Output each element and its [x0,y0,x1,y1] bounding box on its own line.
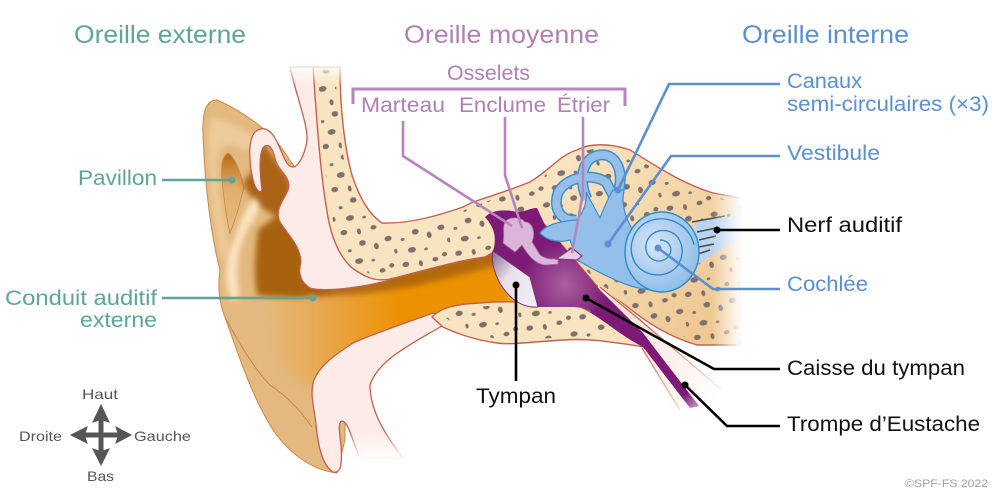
nerve [695,216,740,264]
label: Enclume: Enclume [459,94,546,117]
leader: Marteau [403,121,512,226]
leader: Étrier [572,117,583,253]
label: Osselets: Osselets [447,62,530,85]
compass labels [19,386,191,484]
helix highlight [208,118,258,262]
heading: Oreille externe: Oreille externe [74,21,246,49]
ossicles [503,218,582,265]
malleus and incus [503,218,558,265]
compass labels: Droite [19,428,62,444]
icon: four-way arrows [71,405,131,465]
label: Pavillon: Pavillon [78,167,157,190]
label: Trompe d'Eustache: Trompe d’Eustache [787,413,980,436]
label: Conduit auditif externe [5,287,157,332]
bone pores lower [442,305,628,341]
label: Canaux semi-circulaires [787,70,989,116]
leader: Tympan [512,282,520,381]
compass labels: Gauche [134,428,191,444]
canal outlines [556,155,620,220]
antihelix highlight [226,198,259,300]
leader: Vestibule [604,156,780,248]
cochlea [625,212,699,292]
leader: Pavillon [162,176,236,184]
scapha groove [222,153,244,233]
compass labels: Bas [87,468,114,484]
leader: Trompe d'Eustache [682,382,780,426]
fade right edge [712,190,742,355]
lower pink tissue [312,313,450,472]
nerve fibres [692,216,725,255]
outer ear skin [203,100,345,473]
label: Conduit auditif externe: Conduit auditif [5,287,157,310]
copyright: ©SPF-FS 2022 [905,478,988,490]
label: Canaux semi-circulaires: semi-circulaires (×3) [787,93,989,116]
compass labels: Haut [82,386,118,402]
semicircular canals [556,155,620,220]
upper pink tissue [250,67,400,290]
upper and right temporal bone [313,67,740,345]
stapes [556,248,582,260]
ossicles bracket [353,89,625,106]
fade bottom of tissue [346,430,411,460]
concha dark area [255,205,330,298]
eustachian tube [590,300,699,408]
upper concha shadow [243,140,290,225]
heading: Oreille interne: Oreille interne [742,21,909,49]
middle ear cavity [485,208,643,333]
label: Caisse du tympan: Caisse du tympan [787,357,965,380]
fade top of tissue [285,62,345,86]
external auditory canal [272,254,515,389]
illustration: ear cross-section [203,62,742,473]
label: Étrier: Étrier [557,94,610,117]
lower temporal bone [432,302,645,347]
label: Marteau: Marteau [361,94,445,117]
lobe fold line [225,317,312,427]
tube lining outlines [600,287,722,410]
compass [19,386,191,484]
canal fill [556,155,620,220]
cochlear spiral [631,219,694,275]
eustachian tube lining [598,284,725,412]
label: Nerf auditif: Nerf auditif [787,214,902,237]
heading: Oreille moyenne: Oreille moyenne [404,21,599,49]
bone pores upper [318,70,740,345]
tympanic membrane [492,251,538,307]
cochlea body [625,212,699,292]
label: Cochlée: Cochlée [787,273,868,296]
label: Vestibule: Vestibule [787,142,880,165]
leader: Caisse du tympan [582,294,780,369]
leader: Canaux [614,84,780,194]
leader: Enclume [505,117,522,228]
leader: Conduit auditif [162,294,316,302]
label: Tympan: Tympan [476,385,556,408]
canal upper shadow [313,247,495,296]
leader: Cochlée [654,244,780,289]
leader: Nerf auditif [714,226,780,234]
vestibule [540,190,660,290]
label: Conduit auditif externe: externe [80,309,157,332]
label: Canaux semi-circulaires: Canaux [787,70,863,93]
